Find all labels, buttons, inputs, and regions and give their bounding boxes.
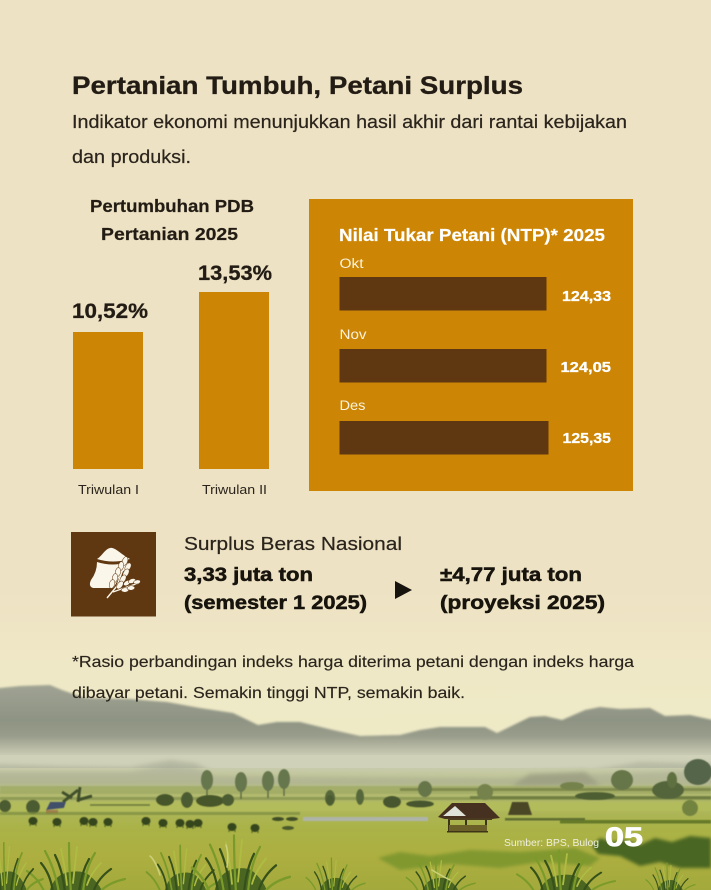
surplus heading: Surplus Beras Nasional <box>184 533 402 554</box>
bar: Nov: 124,05 <box>560 360 611 376</box>
grass <box>0 836 711 890</box>
far fields <box>0 759 711 833</box>
bar: Triwulan II <box>198 262 272 497</box>
background: rice field landscape <box>0 685 711 890</box>
bar: Nov: Nov <box>340 327 367 342</box>
chart heading: Pertumbuhan PDB <box>90 196 254 216</box>
stat: semester 1: (semester 1 2025) <box>184 593 367 614</box>
page number: 05 <box>605 822 643 852</box>
bar: Okt: Okt <box>340 256 364 271</box>
stat: proyeksi <box>440 565 605 614</box>
hut <box>438 803 500 832</box>
panel: PDB bar chart <box>72 196 272 497</box>
bar: Triwulan II: Triwulan II <box>202 482 267 497</box>
bar: Des <box>340 398 611 454</box>
bar: Des: 125,35 <box>562 431 611 447</box>
stat: proyeksi: (proyeksi 2025) <box>440 593 605 614</box>
bar: Triwulan I: 10,52% <box>72 300 148 323</box>
panel: NTP chart <box>309 199 633 491</box>
icon: rice sack and wheat <box>71 532 156 616</box>
subtitle: dan produksi. <box>72 147 191 167</box>
subtitle <box>72 112 627 167</box>
bar: Nov <box>340 327 611 382</box>
bar: Triwulan I: Triwulan I <box>78 482 139 497</box>
arrow <box>395 581 412 599</box>
footnote <box>72 654 634 702</box>
stat: semester 1 <box>184 565 367 614</box>
bar: Triwulan II: 13,53% <box>198 262 272 285</box>
subtitle: Indikator ekonomi menunjukkan hasil akhir dari rantai kebijakan <box>72 112 627 132</box>
bar: Triwulan I <box>72 300 148 497</box>
stat: semester 1: 3,33 juta ton <box>184 565 313 586</box>
footnote: dibayar petani. Semakin tinggi NTP, semakin baik. <box>72 685 465 702</box>
footnote: *Rasio perbandingan indeks harga diterima petani dengan indeks harga <box>72 654 634 671</box>
chart heading <box>90 196 254 244</box>
bar: Okt <box>340 256 611 310</box>
NTP heading: Nilai Tukar Petani (NTP)* 2025 <box>339 225 605 245</box>
bar: Okt: 124,33 <box>562 289 611 305</box>
title: Pertanian Tumbuh, Petani Surplus <box>72 72 523 100</box>
source: Sumber: BPS, Bulog <box>504 837 599 849</box>
bar: Des: Des <box>340 398 366 413</box>
stat: proyeksi: ±4,77 juta ton <box>440 565 582 586</box>
chart heading: Pertanian 2025 <box>101 224 238 244</box>
